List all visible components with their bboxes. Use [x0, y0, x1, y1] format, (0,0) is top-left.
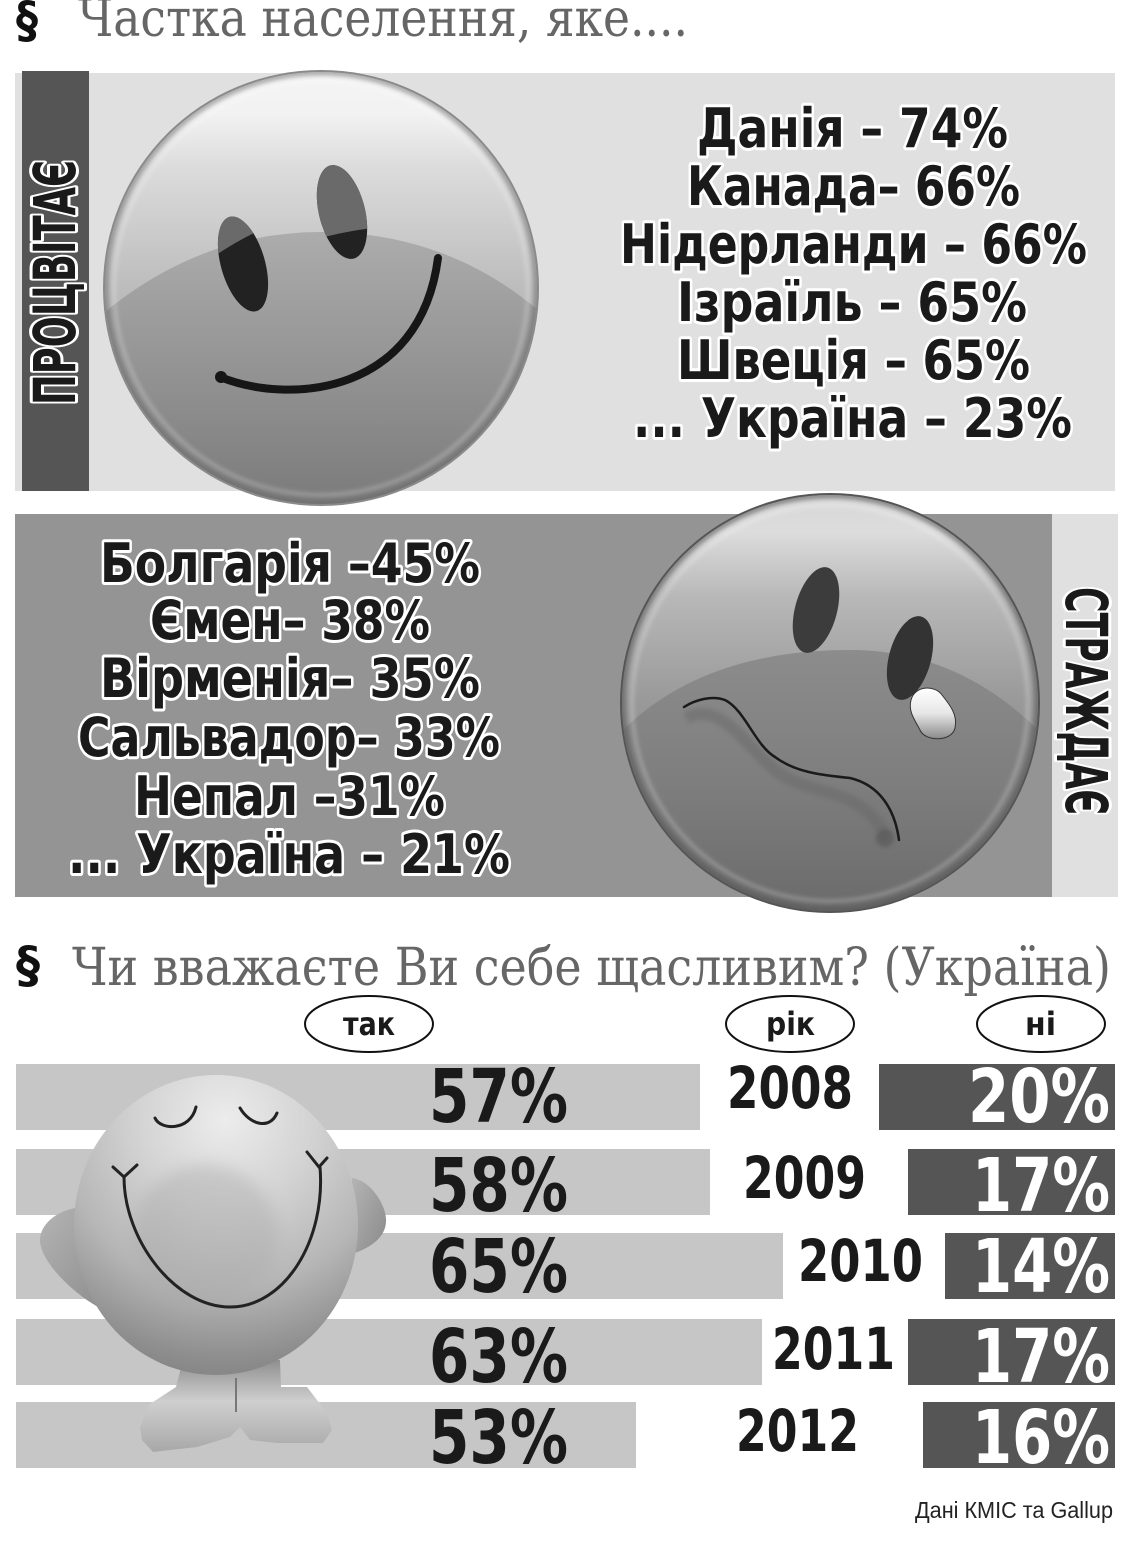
panel: suffering — [15, 490, 1120, 915]
heading: are you happy: § — [16, 936, 40, 994]
chart: no bars — [879, 1064, 1115, 1468]
column header: no: ні — [1025, 1005, 1056, 1043]
values: yes percentages — [429, 1054, 568, 1481]
list: thriving countries: Швеція – 65% — [677, 329, 1030, 392]
values: years — [727, 1054, 923, 1465]
values: no percentages: 20% — [968, 1054, 1110, 1140]
column header: year — [726, 996, 854, 1052]
values: years: 2010 — [798, 1227, 923, 1295]
chart: yes bars — [16, 1064, 783, 1468]
values: yes percentages: 65% — [429, 1224, 568, 1310]
values: years: 2008 — [727, 1054, 853, 1122]
icon: crying face — [618, 490, 1043, 915]
list: suffering countries — [68, 532, 510, 886]
panel: thriving — [15, 70, 1115, 510]
list: suffering countries: Болгарія –45% — [100, 532, 480, 595]
list: thriving countries: ... Україна – 23% — [633, 387, 1072, 450]
list: suffering countries: Сальвадор– 33% — [78, 706, 500, 769]
list: suffering countries: Ємен– 38% — [150, 589, 430, 652]
values: yes percentages: 58% — [429, 1143, 568, 1229]
list: thriving countries: Данія – 74% — [697, 97, 1008, 160]
values: no percentages — [968, 1054, 1110, 1481]
icon: happy toy figure — [40, 1075, 386, 1452]
column header: year: рік — [766, 1005, 815, 1043]
side label bar: thriving: ПРОЦВІТАЄ — [21, 160, 89, 405]
values: years: 2012 — [736, 1397, 859, 1465]
list: suffering countries: ... Україна – 21% — [68, 823, 510, 886]
list: thriving countries — [620, 97, 1087, 450]
source note: Дані КМІС та Gallup — [915, 1497, 1113, 1523]
list: thriving countries: Канада– 66% — [687, 155, 1020, 218]
values: yes percentages: 63% — [429, 1314, 568, 1400]
values: years: 2011 — [772, 1315, 895, 1383]
side label bar: suffering — [1052, 514, 1120, 897]
values: yes percentages: 57% — [429, 1054, 568, 1140]
icon: tear — [910, 688, 956, 739]
list: suffering countries: Вірменія– 35% — [100, 647, 480, 710]
column header: yes: так — [343, 1005, 395, 1043]
column header: no — [977, 996, 1105, 1052]
list: thriving countries: Ізраїль – 65% — [677, 271, 1027, 334]
values: yes percentages: 53% — [429, 1395, 568, 1481]
column header: yes — [305, 996, 433, 1052]
icon: smiling face — [100, 70, 545, 510]
list: suffering countries: Непал –31% — [134, 765, 445, 828]
values: years: 2009 — [743, 1144, 866, 1212]
side label bar: suffering: СТРАЖДАЄ — [1052, 587, 1120, 815]
